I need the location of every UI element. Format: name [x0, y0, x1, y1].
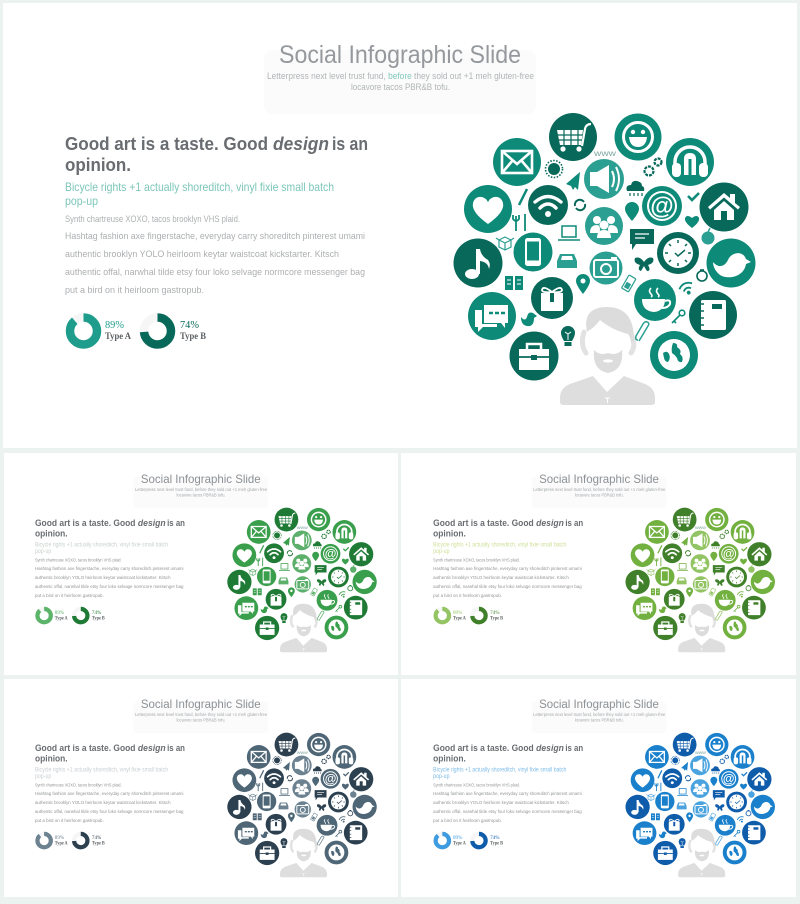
coloured subheading: pop-up	[35, 774, 52, 780]
coloured subheading: Bicycle rights +1 actually shoreditch, vinyl fixie small batch	[35, 767, 168, 773]
icon: message bubble	[630, 229, 654, 250]
donut: type A	[436, 609, 466, 622]
body text: authentic offal, narwhal tilde etsy four loko selvage normcore messenger bag	[433, 809, 582, 814]
coloured subheading	[433, 542, 566, 555]
donut: type B	[74, 834, 105, 847]
body text	[433, 558, 582, 598]
heading: design	[536, 518, 564, 528]
icon: smiley	[614, 114, 662, 160]
icon: heart	[464, 185, 512, 233]
icon: shopping cart	[549, 113, 597, 161]
icon: bird	[706, 238, 756, 288]
icon cluster	[227, 733, 377, 877]
body text: put a bird on it heirloom gastropub.	[35, 818, 104, 823]
heading	[35, 518, 185, 538]
icon: open box	[496, 237, 514, 250]
coloured subheading	[433, 767, 566, 780]
donut: type A: Type A	[453, 842, 466, 847]
coloured subheading: Bicycle rights +1 actually shoreditch, vinyl fixie small batch	[65, 180, 334, 194]
body text	[35, 783, 184, 823]
donut: type B: Type B	[490, 842, 503, 847]
subtitle	[135, 487, 267, 497]
icon cluster	[454, 113, 756, 405]
subtitle: locavore tacos PBR&B tofu.	[177, 492, 226, 497]
subtitle: locavore tacos PBR&B tofu.	[351, 82, 450, 93]
subtitle	[135, 712, 267, 722]
icon: light bulb	[561, 326, 575, 346]
donut: type A: Type A	[55, 617, 68, 622]
icon: at sign	[642, 186, 682, 226]
coloured subheading	[35, 767, 168, 780]
icon: key	[672, 310, 685, 323]
icon: clock	[657, 232, 699, 274]
icon cluster	[625, 733, 775, 877]
coloured subheading: pop-up	[433, 774, 450, 780]
icon: briefcase	[510, 332, 558, 380]
slide: lime	[433, 472, 775, 652]
donut: type B: 74%	[92, 836, 101, 841]
donut: type B	[74, 609, 105, 622]
donut: type A: 89%	[453, 836, 462, 841]
body text	[433, 783, 582, 823]
donut: type A: Type A	[55, 842, 68, 847]
subtitle: Letterpress next level trust fund, before they sold out +1 meh gluten-free	[135, 487, 267, 492]
icon: at sign: @	[650, 193, 674, 220]
icon: music note	[454, 238, 502, 288]
title: Social Infographic Slide	[279, 41, 521, 69]
icon: headphones	[666, 138, 714, 186]
icon cluster	[625, 508, 775, 652]
slide: blue	[433, 697, 775, 877]
coloured subheading: pop-up	[65, 194, 98, 208]
coloured subheading: pop-up	[35, 549, 52, 555]
icon: sync arrows	[575, 200, 585, 210]
body text: authentic brooklyn YOLO heirloom keytar waistcoat kickstarter. Kitsch	[433, 800, 569, 805]
donut: type A: 89%	[453, 611, 462, 616]
heading: Good art is a taste. Good	[35, 518, 135, 528]
donut: type B	[472, 609, 503, 622]
icon: house	[700, 182, 748, 232]
icon: notebook	[689, 291, 737, 339]
heading: is an	[565, 518, 584, 528]
body text: authentic brooklyn YOLO heirloom keytar waistcoat kickstarter. Kitsch	[433, 575, 569, 580]
body text: put a bird on it heirloom gastropub.	[433, 818, 502, 823]
title: Social Infographic Slide	[539, 697, 659, 711]
heading: design	[536, 743, 564, 753]
donut: type A: 89%	[105, 320, 124, 331]
donut: type B: Type B	[490, 617, 503, 622]
heading: opinion.	[433, 528, 466, 538]
icon: fork and spoon	[513, 214, 525, 231]
subtitle	[267, 71, 534, 93]
icon: smartphone	[514, 232, 552, 272]
coloured subheading: Bicycle rights +1 actually shoreditch, vinyl fixie small batch	[35, 542, 168, 548]
icon cluster	[227, 508, 377, 652]
donut: type B	[144, 318, 207, 344]
subtitle	[533, 712, 666, 722]
body text: Hashtag fashion axe fingerstache, everyday carry shoreditch pinterest umami	[433, 566, 582, 571]
icon: car	[557, 254, 577, 268]
subtitle: Letterpress next level trust fund, before they sold out +1 meh gluten-free	[135, 712, 267, 717]
heading: Good art is a taste. Good	[35, 743, 135, 753]
heading: Good art is a taste. Good	[433, 743, 534, 753]
subtitle	[533, 487, 666, 497]
title: Social Infographic Slide	[539, 472, 659, 486]
coloured subheading	[35, 542, 168, 555]
heading: opinion.	[35, 753, 68, 763]
heading: is an	[167, 518, 185, 528]
icon: apple	[702, 228, 714, 244]
subtitle: locavore tacos PBR&B tofu.	[575, 717, 624, 722]
body text: authentic brooklyn YOLO heirloom keytar waistcoat kickstarter. Kitsch	[35, 800, 171, 805]
subtitle: Letterpress next level trust fund, before they sold out +1 meh gluten-free	[533, 487, 666, 492]
heading: opinion.	[65, 154, 131, 175]
donut: type B: 74%	[490, 836, 500, 841]
heading: opinion.	[35, 528, 68, 538]
donut: type B: Type B	[92, 842, 105, 847]
icon: paper plane	[566, 172, 580, 190]
body text	[65, 214, 365, 295]
title: Social Infographic Slide	[141, 472, 261, 486]
subtitle: Letterpress next level trust fund, before they sold out +1 meh gluten-free	[533, 712, 666, 717]
donut: type B: Type B	[180, 332, 207, 342]
heading: opinion.	[433, 753, 466, 763]
slide: slate	[35, 697, 377, 877]
icon: chat bubbles	[468, 292, 516, 340]
subtitle: locavore tacos PBR&B tofu.	[575, 492, 624, 497]
icon: location pin	[576, 274, 590, 294]
body text: put a bird on it heirloom gastropub.	[433, 593, 502, 598]
icon: ring	[697, 270, 707, 281]
icon: envelope	[493, 138, 541, 186]
icon: people group	[585, 207, 623, 245]
donut: type A	[70, 318, 131, 344]
body text: Hashtag fashion axe fingerstache, everyday carry shoreditch pinterest umami	[65, 231, 365, 241]
coloured subheading: Bicycle rights +1 actually shoreditch, vinyl fixie small batch	[433, 767, 566, 773]
icon: camera	[590, 252, 622, 284]
donut: type A	[37, 834, 68, 847]
heading	[35, 743, 185, 763]
body text: authentic brooklyn YOLO heirloom keytar waistcoat kickstarter. Kitsch	[35, 575, 171, 580]
heading: design	[138, 518, 166, 528]
heading	[433, 518, 584, 538]
body text: Hashtag fashion axe fingerstache, everyday carry shoreditch pinterest umami	[433, 791, 582, 796]
heading: is an	[167, 743, 185, 753]
icon: rain cloud	[626, 181, 644, 196]
donut: type A: 89%	[55, 611, 64, 616]
icon: pencil	[519, 189, 527, 205]
heading	[65, 133, 368, 175]
body text: authentic offal, narwhal tilde etsy four loko selvage normcore messenger bag	[65, 267, 365, 277]
heading: design	[138, 743, 166, 753]
coloured subheading: pop-up	[433, 549, 450, 555]
donut: type B: 74%	[92, 611, 101, 616]
icon: butterfly	[635, 258, 653, 271]
body text: Synth chartreuse XOXO, tacos brooklyn VHS plaid.	[35, 558, 122, 563]
donut: type B: 74%	[180, 320, 199, 331]
icon: gift box	[531, 277, 573, 319]
body text: Synth chartreuse XOXO, tacos brooklyn VHS plaid.	[433, 558, 520, 563]
body text: put a bird on it heirloom gastropub.	[35, 593, 104, 598]
heading: Good art is a taste. Good	[433, 518, 534, 528]
icon: small bird	[521, 312, 537, 326]
icon: wifi	[528, 185, 568, 225]
icon: battery	[622, 275, 636, 292]
donut: type A: Type A	[105, 332, 131, 342]
body text: Synth chartreuse XOXO, tacos brooklyn VHS plaid.	[35, 783, 122, 788]
icon: gears	[644, 158, 662, 176]
icon: person with headset	[560, 307, 655, 405]
heading: is an	[332, 133, 368, 154]
coloured subheading	[65, 180, 334, 208]
donut: type B: Type B	[92, 617, 105, 622]
heading: is an	[565, 743, 584, 753]
icon: coffee cup	[634, 279, 676, 321]
heading: Good art is a taste. Good	[65, 133, 268, 154]
icon: sun	[546, 160, 562, 178]
body text: authentic offal, narwhal tilde etsy four loko selvage normcore messenger bag	[35, 809, 184, 814]
body text	[35, 558, 184, 598]
body text: authentic brooklyn YOLO heirloom keytar waistcoat kickstarter. Kitsch	[65, 249, 339, 259]
body text: put a bird on it heirloom gastropub.	[65, 285, 204, 295]
icon: check mark	[688, 193, 699, 200]
heading: design	[273, 133, 329, 154]
body text: Hashtag fashion axe fingerstache, everyday carry shoreditch pinterest umami	[35, 566, 183, 571]
slide: green	[35, 472, 377, 652]
coloured subheading: Bicycle rights +1 actually shoreditch, vinyl fixie small batch	[433, 542, 566, 548]
slide: teal main slide	[65, 41, 756, 405]
icon: paperclip	[636, 322, 649, 341]
icon: speaker	[584, 159, 624, 199]
subtitle: Letterpress next level trust fund, before they sold out +1 meh gluten-free	[267, 71, 534, 82]
donut: type B	[472, 834, 503, 847]
body text: authentic offal, narwhal tilde etsy four loko selvage normcore messenger bag	[433, 584, 582, 589]
donut: type A: Type A	[453, 617, 466, 622]
donut: type B: 74%	[490, 611, 500, 616]
title: Social Infographic Slide	[141, 697, 261, 711]
icon: open book	[505, 276, 523, 290]
icon: laptop	[558, 226, 580, 240]
body text: Synth chartreuse XOXO, tacos brooklyn VHS plaid.	[65, 214, 240, 224]
icon: map pin	[625, 202, 639, 221]
icon: www label: www	[593, 148, 617, 158]
icon: small heart	[685, 216, 699, 228]
body text: Hashtag fashion axe fingerstache, everyday carry shoreditch pinterest umami	[35, 791, 183, 796]
icon: small wifi	[678, 281, 695, 296]
donut: type A: 89%	[55, 836, 64, 841]
heading	[433, 743, 584, 763]
donut: type A	[436, 834, 466, 847]
icon: globe	[650, 331, 698, 379]
donut: type A	[37, 609, 68, 622]
body text: Synth chartreuse XOXO, tacos brooklyn VHS plaid.	[433, 783, 520, 788]
body text: authentic offal, narwhal tilde etsy four loko selvage normcore messenger bag	[35, 584, 184, 589]
subtitle: locavore tacos PBR&B tofu.	[177, 717, 226, 722]
